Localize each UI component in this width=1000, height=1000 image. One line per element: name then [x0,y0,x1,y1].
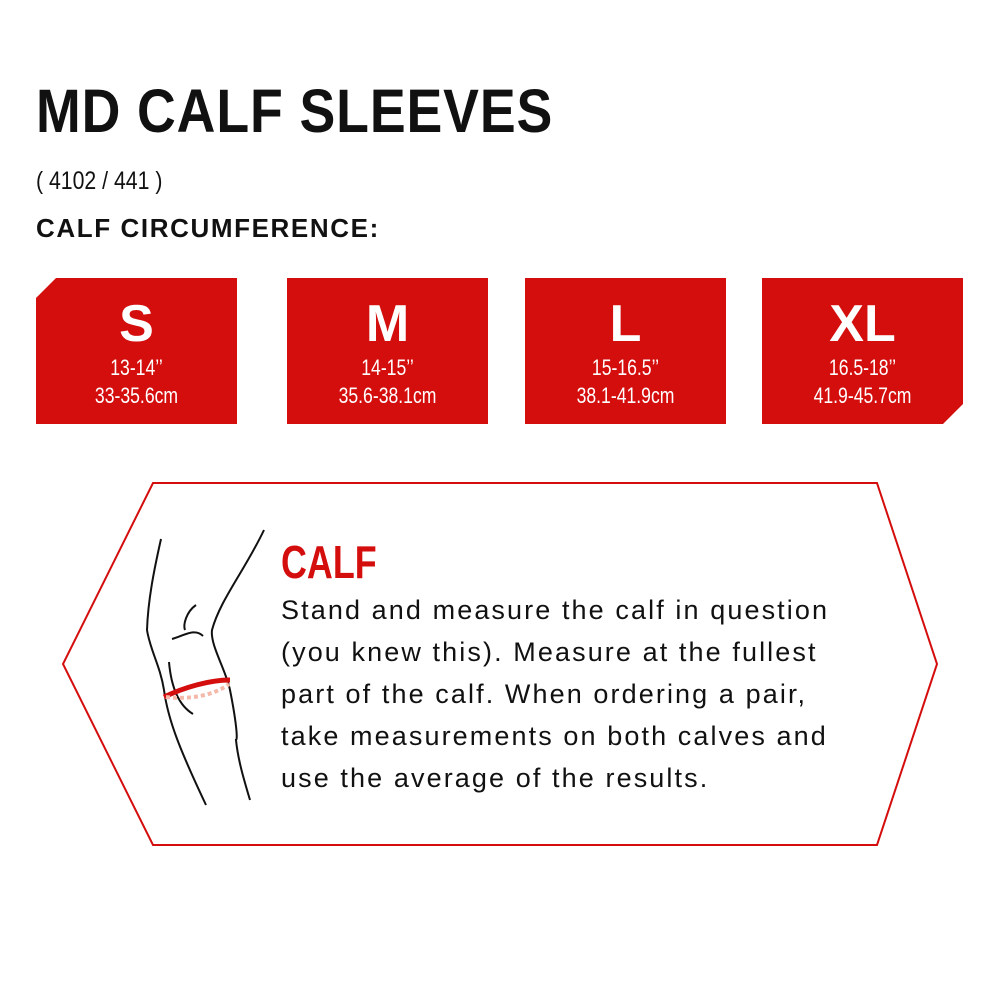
size box M: M [366,295,409,353]
size box L [525,278,726,424]
icon: leg [147,530,264,805]
size box L: L [610,295,641,353]
size box XL: 41.9-45.7cm [814,383,911,408]
title: MD CALF SLEEVES [36,77,553,145]
size box S: 33-35.6cm [95,383,178,408]
size box M [287,278,488,424]
size box XL [762,278,963,424]
size box XL: XL [829,295,896,353]
size box L: 38.1-41.9cm [577,383,674,408]
size box S: S [119,295,154,353]
text block: instructions: Stand and measure the calf in question [281,595,829,625]
size box XL: 16.5-18’’ [829,355,896,380]
subtitle code: ( 4102 / 441 ) [36,167,162,195]
size box S [36,278,237,424]
size box S: 13-14’’ [110,355,163,380]
heading: calf circumference: CALF CIRCUMFERENCE: [36,213,380,243]
text block: instructions: take measurements on both calves and [281,721,828,751]
text block: instructions: use the average of the results. [281,763,709,793]
size box M: 35.6-38.1cm [339,383,436,408]
text block: instructions: part of the calf. When ordering a pair, [281,679,807,709]
text block: instructions [281,595,829,793]
heading: calf: CALF [281,536,377,588]
text block: instructions: (you knew this). Measure at the fullest [281,637,818,667]
size box L: 15-16.5’’ [592,355,659,380]
size box M: 14-15’’ [361,355,414,380]
